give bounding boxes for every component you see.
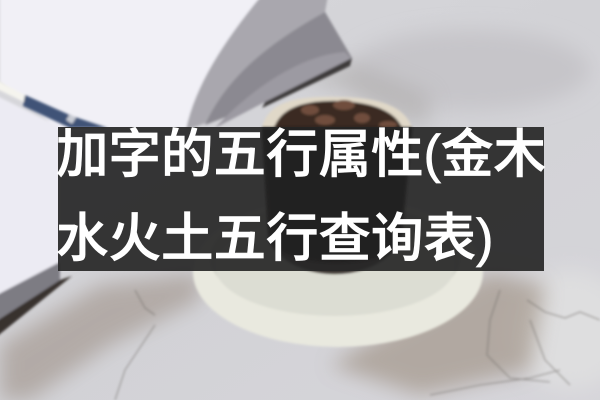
dark title banner xyxy=(58,127,544,271)
pen xyxy=(0,80,108,128)
notebook pages xyxy=(0,0,352,338)
marble veins xyxy=(115,290,600,400)
coffee cup with beans xyxy=(262,97,412,274)
saucer xyxy=(193,197,483,347)
title line 1: 加字的五行属性(金木 xyxy=(56,125,546,184)
cup shape visible through banner xyxy=(262,127,412,262)
title line 2: 水火土五行查询表) xyxy=(56,209,493,268)
